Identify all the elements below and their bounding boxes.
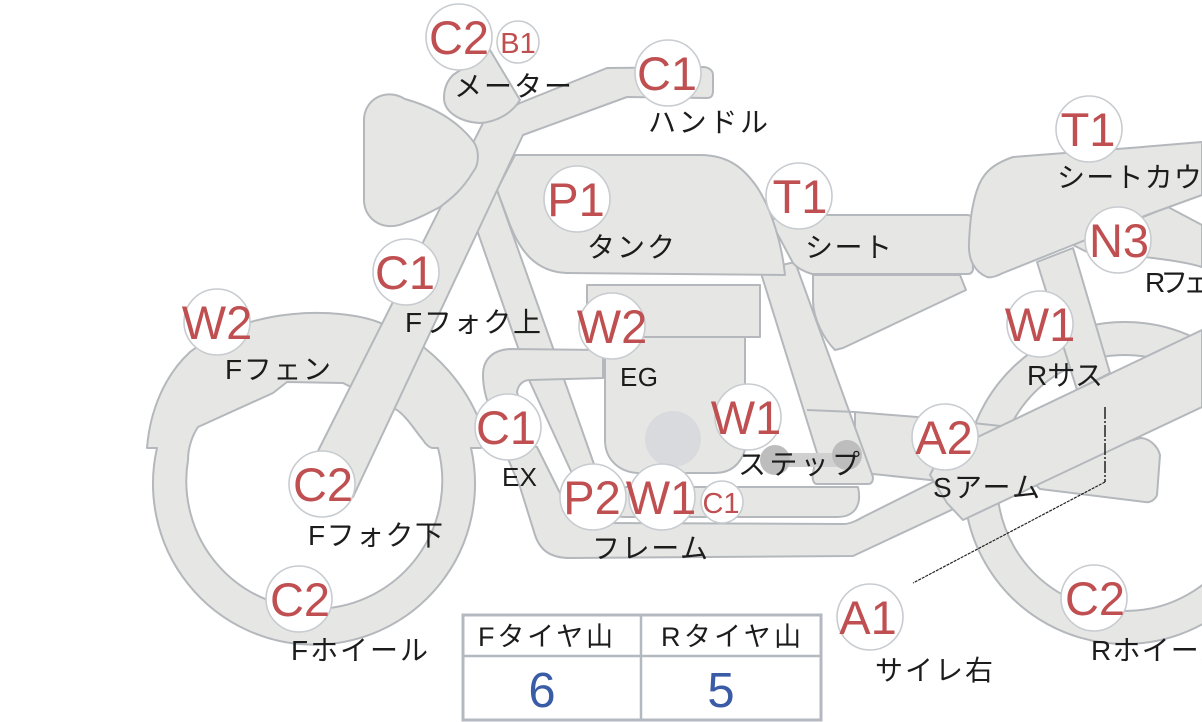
muffler — [930, 330, 1202, 520]
label: swing arm: Sアーム — [933, 472, 1040, 503]
badge: P1 tank: P1 — [547, 173, 605, 226]
label: seat: シート — [805, 232, 892, 263]
label: step: ステップ — [738, 449, 860, 480]
label: frame: フレーム — [592, 533, 708, 564]
crankcase circle — [645, 411, 701, 467]
seat cowl — [969, 142, 1202, 277]
front wheel and fender — [147, 313, 481, 645]
badge: P2 frame — [560, 464, 626, 530]
badge: C1 exhaust: C1 — [476, 401, 536, 454]
dashed leader line — [913, 407, 1105, 583]
badge: W2 engine: W2 — [577, 300, 647, 353]
badge: A1 muffler: A1 — [839, 591, 897, 644]
badge: A2 swing arm: A2 — [915, 411, 973, 464]
label: engine: EG — [620, 362, 658, 392]
label: handle: ハンドル — [648, 107, 768, 138]
rear fender strip — [1073, 207, 1202, 267]
lower frame tube — [500, 440, 962, 558]
label: lower fork: Fフォク下 — [308, 520, 443, 551]
badge: B1 meter: B1 — [500, 28, 536, 60]
badge: C2 lower fork: C2 — [293, 458, 353, 511]
label: front wheel: Fホイール — [291, 635, 428, 666]
seat — [770, 215, 973, 274]
badge: W1 step: W1 — [711, 391, 781, 444]
engine upper block — [587, 285, 760, 337]
badge: B1 meter — [497, 21, 539, 63]
label: rear suspension: Rサス — [1027, 360, 1103, 391]
exhaust pipe — [483, 349, 603, 425]
badge: C1 frame — [701, 481, 743, 523]
badge: P2 frame: P2 — [563, 471, 621, 524]
engine lower body — [605, 337, 745, 473]
seat tube crossbar — [807, 410, 855, 412]
label: tank: タンク — [587, 232, 675, 263]
label: front fender: Fフェン — [225, 354, 331, 385]
badge: C2 meter: C2 — [429, 11, 489, 64]
badge: W1 frame: W1 — [626, 471, 696, 524]
badge: C1 handle: C1 — [637, 47, 697, 100]
meter — [444, 50, 520, 123]
badge: A1 muffler — [837, 584, 903, 650]
badge: T1 seat cowl: T1 — [1061, 103, 1115, 156]
table header: rear tire: Rタイヤ山 — [661, 622, 801, 652]
badge: T1 seat — [766, 163, 832, 229]
step bar — [760, 440, 862, 475]
badge: C1 frame: C1 — [702, 488, 740, 520]
fork and handlebar — [317, 67, 713, 497]
side cover — [813, 275, 966, 350]
rear wheel — [964, 322, 1202, 644]
badge: W2 front fender: W2 — [182, 296, 252, 349]
badge: C1 upper fork: C1 — [375, 246, 435, 299]
badge: A2 swing arm — [912, 404, 978, 470]
swing arm tail — [1020, 438, 1160, 502]
seat tube — [760, 262, 873, 484]
front down tube and chain rail — [477, 190, 859, 517]
label: meter: メーター — [454, 71, 572, 102]
tire tread table — [463, 615, 821, 720]
badge: T1 seat cowl — [1056, 96, 1122, 162]
label: upper fork: Fフォク上 — [405, 307, 541, 338]
headlight — [364, 94, 478, 226]
badge: W1 rear suspension: W1 — [1005, 298, 1075, 351]
badge: N3 rear fender: N3 — [1089, 214, 1149, 267]
label: exhaust: EX — [502, 462, 537, 492]
badge: C2 rear wheel: C2 — [1065, 572, 1125, 625]
badge: C2 front wheel: C2 — [270, 573, 330, 626]
label: muffler right: サイレ右 — [875, 655, 993, 686]
table value: front tread: 6 — [528, 664, 556, 718]
table header: front tire: Fタイヤ山 — [478, 622, 613, 652]
fuel tank — [497, 155, 785, 275]
rear suspension — [1037, 248, 1110, 390]
badge: P1 tank — [544, 166, 610, 232]
swing arm — [855, 412, 1010, 490]
badge: T1 seat: T1 — [773, 170, 827, 223]
table value: rear tread: 5 — [707, 664, 735, 718]
